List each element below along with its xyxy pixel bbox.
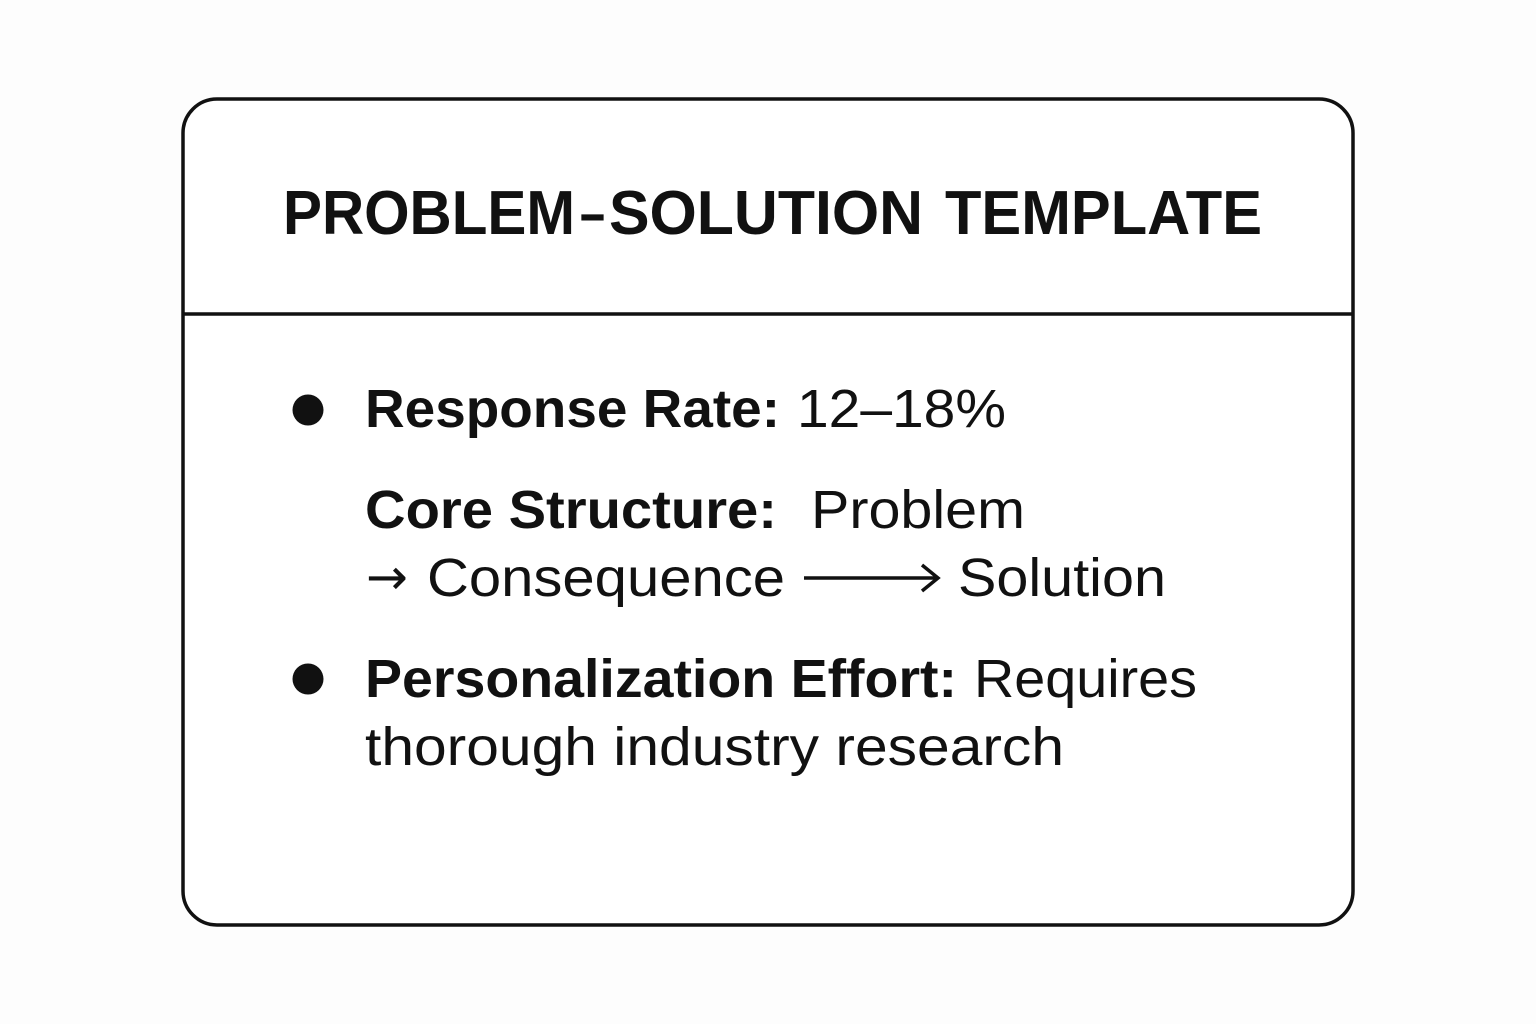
text: arrow to consequence: Consequence: [427, 548, 785, 608]
text: personalization effort: [365, 649, 1197, 709]
bullet: personalization effort: [292, 664, 324, 694]
title: –: [580, 179, 605, 248]
text: industry research: thorough industry research: [365, 717, 1064, 777]
arrow: consequence to solution: [804, 565, 938, 591]
text: personalization effort: Personalization Effort:: [365, 649, 957, 709]
title: SOLUTION: [609, 179, 923, 248]
title: TEMPLATE: [945, 179, 1262, 248]
text: response rate: [365, 379, 1006, 439]
text: core structure heading: [365, 480, 1025, 540]
text: response rate: Response Rate:: [365, 379, 780, 439]
title: [283, 179, 1262, 248]
text: solution: Solution: [958, 548, 1166, 608]
text: arrow to consequence: →: [366, 548, 408, 606]
header divider: [183, 312, 1353, 316]
panel: template card: [183, 99, 1353, 925]
title: PROBLEM: [283, 179, 575, 248]
text: response rate: 12–18%: [797, 379, 1006, 439]
bullet: response rate: [292, 394, 324, 426]
text: personalization effort: Requires: [974, 649, 1197, 709]
text: core structure heading: Problem: [811, 480, 1025, 540]
text: core structure heading: Core Structure:: [365, 480, 777, 540]
